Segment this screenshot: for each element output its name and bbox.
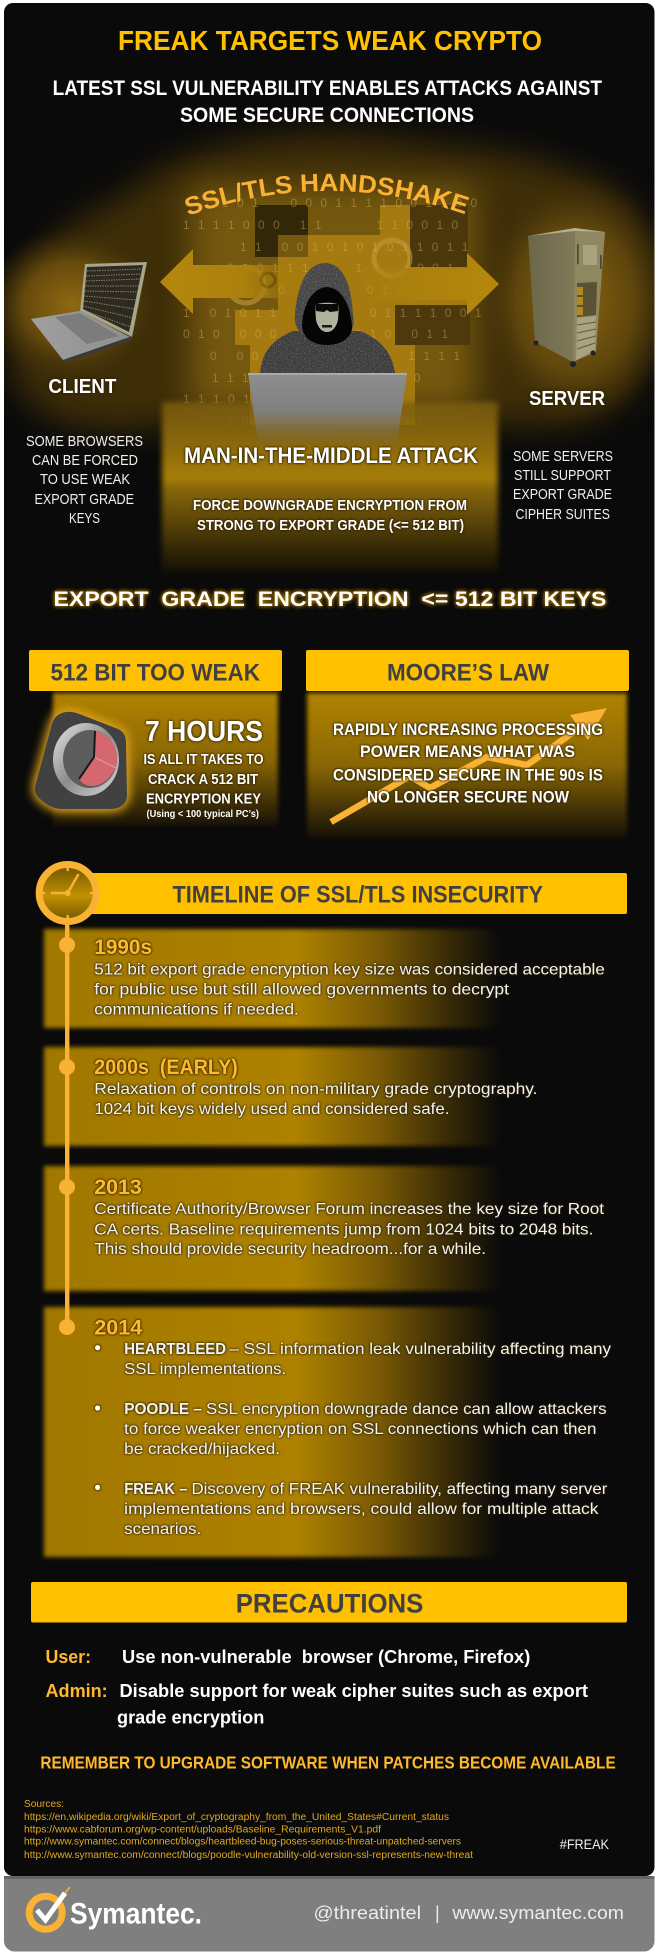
- year: 1990s: [94, 936, 152, 959]
- subtitle: SOME SECURE CONNECTIONS: [180, 104, 474, 127]
- sources: https://en.wikipedia.org/wiki/Export_of_cryptography_from_the_United_States#Current_status: [24, 1812, 449, 1823]
- description: for public use but still allowed governments to decrypt: [94, 982, 510, 998]
- stat: 7 hours: 7 HOURS: [145, 716, 263, 748]
- text block: NO LONGER SECURE NOW: [367, 788, 570, 806]
- gold attack glow panel: [162, 402, 498, 572]
- sources: http://www.symantec.com/connect/blogs/poodle-vulnerability-old-version-ssl-represents-new-threat: [24, 1850, 473, 1861]
- bullet: heartbleed: HEARTBLEED: [124, 1341, 226, 1358]
- bullet: freak: Discovery of FREAK vulnerability, affecting many server: [192, 1481, 608, 1498]
- bullet: heartbleed: SSL implementations.: [124, 1361, 286, 1378]
- text block: RAPIDLY INCREASING PROCESSING: [333, 720, 603, 739]
- description: CA certs. Baseline requirements jump from 1024 bits to 2048 bits.: [94, 1221, 593, 1238]
- bullet: poodle: [95, 1401, 606, 1458]
- panel: 512 bit too weak: [29, 650, 282, 826]
- text block: client note: SOME BROWSERS: [26, 434, 143, 450]
- sources: Sources:: [24, 1799, 64, 1810]
- text block: [333, 720, 603, 806]
- binary circuit backdrop: 1 0 1 0 0 0 1 1 1 1 0 0 1 1 0 0: [222, 196, 480, 210]
- icon: hooded hacker at laptop: [248, 263, 407, 443]
- sources: https://www.cabforum.org/wp-content/uploads/Baseline_Requirements_V1.pdf: [24, 1825, 381, 1836]
- stat: 7 hours: (Using < 100 typical PC’s): [146, 808, 259, 820]
- website: www.symantec.com: [451, 1903, 624, 1923]
- binary circuit backdrop: 1 1 1 0 1 1 0 1 0 1 1 0: [183, 392, 404, 406]
- heading: man in the middle: MAN-IN-THE-MIDDLE ATTACK: [184, 443, 478, 468]
- text block: client note: TO USE WEAK: [40, 472, 130, 488]
- description: Relaxation of controls on non-military grade cryptography.: [94, 1081, 538, 1098]
- precautions: admin: Disable support for weak cipher suites such as export: [120, 1681, 588, 1701]
- bullet: freak: scenarios.: [124, 1521, 201, 1538]
- label: server: SERVER: [529, 388, 606, 410]
- curved heading: SSL/TLS handshake: SSL/TLS HANDSHAKE: [185, 174, 470, 214]
- precautions: user: Use non-vulnerable browser (Chrome, Firefox): [122, 1647, 530, 1667]
- bullet: freak: FREAK –: [124, 1481, 187, 1498]
- subtitle: LATEST SSL VULNERABILITY ENABLES ATTACKS AGAINST: [53, 77, 602, 100]
- icon: server rack: [528, 228, 605, 367]
- text block: client note: KEYS: [69, 511, 100, 527]
- heading: MOORE’S LAW: [387, 660, 549, 686]
- icon: client laptop: [31, 262, 147, 363]
- text block: client note: [26, 434, 143, 527]
- bullet: poodle: SSL encryption downgrade dance can allow attackers: [206, 1401, 606, 1418]
- icon: symantec logo: [29, 1887, 70, 1929]
- text block: downgrade: [193, 498, 467, 534]
- binary circuit backdrop: 1 1 0 0 1 0 1 0 1 0 1 1 0 1 1: [240, 240, 471, 254]
- panel: moore's law: [306, 650, 629, 837]
- text block: POWER MEANS WHAT WAS: [360, 742, 575, 761]
- separator: |: [435, 1903, 440, 1923]
- arrow: to server: [360, 253, 499, 315]
- bullet: poodle: POODLE –: [124, 1401, 202, 1418]
- text block: client note: EXPORT GRADE: [34, 492, 134, 508]
- description: Certificate Authority/Browser Forum increases the key size for Root: [94, 1201, 605, 1218]
- description: communications if needed.: [94, 1001, 299, 1018]
- header bar: [29, 650, 282, 691]
- binary circuit backdrop: 1 0 1 1 0 1 1 0 1: [227, 414, 426, 428]
- description: [94, 1081, 538, 1118]
- timeline entry: 2000s: [44, 1047, 538, 1146]
- binary circuit backdrop: 1 1 1 0 1 0 1 0 1 1 0: [210, 283, 451, 297]
- label: client: CLIENT: [48, 376, 116, 398]
- title: FREAK TARGETS WEAK CRYPTO: [118, 25, 542, 56]
- wordmark: Symantec.: [70, 1897, 202, 1930]
- footer: [4, 1876, 654, 1952]
- text block: downgrade: STRONG TO EXPORT GRADE (<= 512 BIT): [197, 518, 464, 534]
- timeline spine and dots: [59, 920, 75, 1335]
- text block: server note: SOME SERVERS: [513, 449, 613, 465]
- text block: CONSIDERED SECURE IN THE 90s IS: [333, 766, 603, 784]
- description: This should provide security headroom...for a while.: [94, 1241, 486, 1258]
- subtitle: [53, 77, 602, 127]
- bullet: freak: [95, 1481, 608, 1538]
- header bar: [306, 650, 629, 691]
- description: 1024 bit keys widely used and considered safe.: [94, 1101, 450, 1118]
- binary circuit backdrop: 1 1 1 0 1 1 0 0 0: [212, 371, 423, 385]
- stat: 7 hours: CRACK A 512 BIT: [148, 772, 258, 788]
- stat: 7 hours: IS ALL IT TAKES TO: [144, 752, 264, 768]
- icon: timeline clock: [39, 864, 96, 922]
- description: [94, 961, 605, 1018]
- text block: server note: STILL SUPPORT: [514, 468, 611, 484]
- year: 2014: [94, 1316, 143, 1339]
- text block: downgrade: FORCE DOWNGRADE ENCRYPTION FROM: [193, 498, 467, 514]
- description: 512 bit export grade encryption key size was considered acceptable: [94, 961, 605, 978]
- heading: TIMELINE OF SSL/TLS INSECURITY: [172, 882, 543, 909]
- binary circuit backdrop: 0 1 0 0 0 0 0 1 0 0 1 1: [183, 327, 451, 341]
- text block: server note: CIPHER SUITES: [516, 507, 610, 523]
- stat: 7 hours: ENCRYPTION KEY: [146, 792, 261, 808]
- stat: 7 hours: [144, 716, 264, 820]
- timeline header bar: [80, 873, 627, 914]
- text block: server note: [513, 449, 613, 523]
- year: 2000s (EARLY): [94, 1056, 238, 1079]
- year: 2013: [94, 1176, 142, 1199]
- binary circuit backdrop: 1 0 1 0 1 1 0 0 1 1 1 1 0 0 1: [183, 306, 484, 320]
- sources: http://www.symantec.com/connect/blogs/heartbleed-bug-poses-serious-threat-unpatched-servers: [24, 1837, 461, 1848]
- timeline entry: 2014: [44, 1307, 611, 1557]
- precautions: admin: Admin:: [46, 1681, 108, 1701]
- hero illustration background glow: [0, 135, 660, 430]
- arrow: rising trend: [331, 708, 607, 822]
- bullet: heartbleed: [95, 1341, 611, 1378]
- binary circuit backdrop: 0 0 0 0 0 0 0 1 1 1 1: [210, 349, 463, 363]
- precautions: admin: grade encryption: [117, 1707, 264, 1727]
- timeline entry: 2013: [44, 1166, 605, 1291]
- text block: client note: CAN BE FORCED: [32, 453, 138, 469]
- heading: PRECAUTIONS: [236, 1589, 423, 1619]
- heading: 512 BIT TOO WEAK: [50, 660, 261, 686]
- bullet: poodle: to force weaker encryption on SSL connections which can then: [124, 1421, 596, 1438]
- precautions: admin: [46, 1681, 588, 1727]
- timeline entry: 1990s: [44, 929, 605, 1028]
- banner text: export grade: EXPORT GRADE ENCRYPTION <= 512 BIT KEYS: [54, 588, 606, 611]
- sources: [24, 1799, 473, 1861]
- bullet: poodle: be cracked/hijacked.: [124, 1441, 280, 1458]
- binary circuit backdrop: [183, 196, 484, 428]
- precautions: user: User:: [46, 1647, 91, 1667]
- text block: server note: EXPORT GRADE: [513, 487, 612, 503]
- binary circuit backdrop: 1 1 1 1 0 0 0 1 1 1 1 0 0 1 0: [183, 218, 461, 232]
- precautions header bar: [31, 1582, 627, 1622]
- binary circuit backdrop: 0 1 0 1 1 1 1 1 0 0 1: [227, 261, 456, 275]
- description: [94, 1201, 605, 1258]
- arrow: to client: [160, 249, 300, 314]
- bullet: freak: implementations and browsers, could allow for multiple attack: [124, 1501, 600, 1518]
- social handle: @threatintel: [314, 1903, 421, 1923]
- hashtag: #FREAK: [560, 1837, 609, 1852]
- bullet: heartbleed: – SSL information leak vulnerability affecting many: [229, 1341, 611, 1358]
- icon: stopwatch: [35, 712, 127, 809]
